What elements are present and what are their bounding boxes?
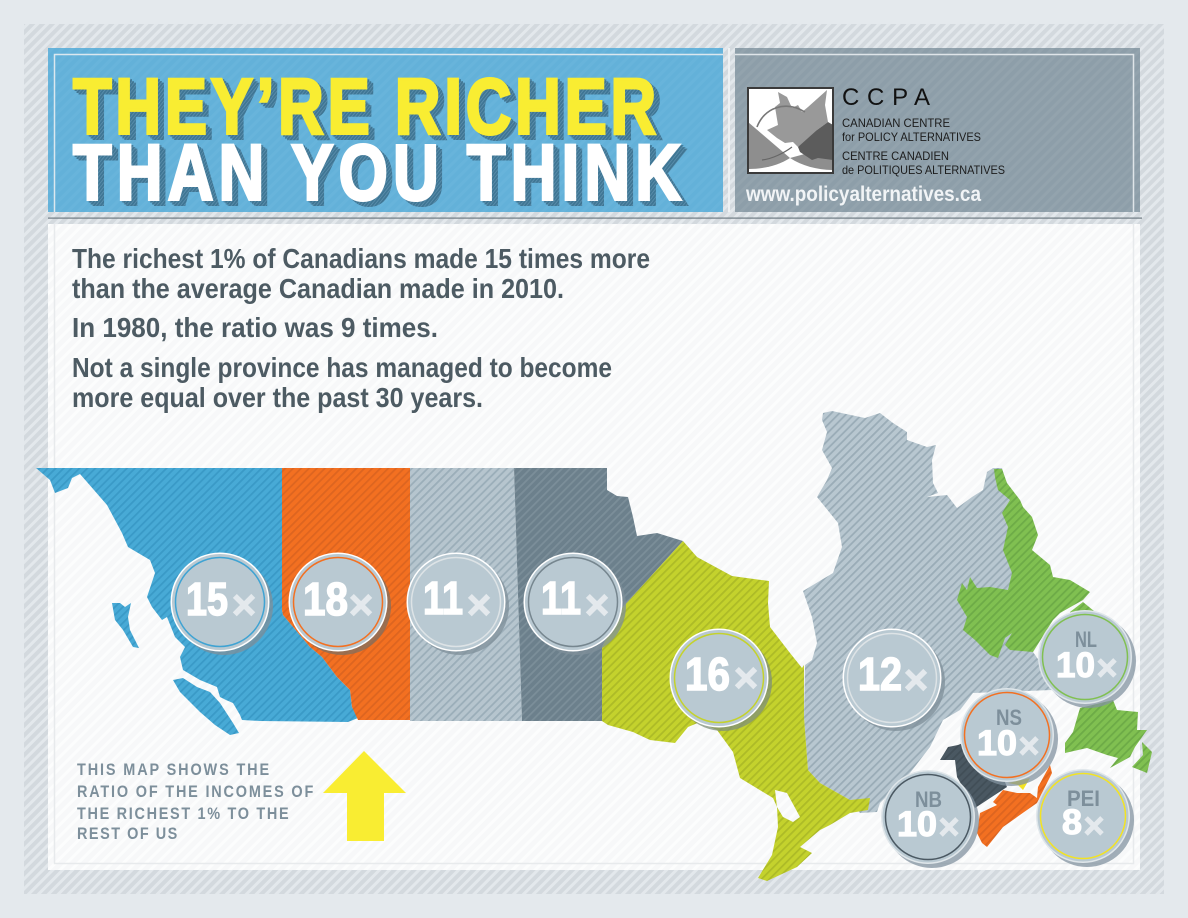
badge: PEI 8x: PEI <box>1067 786 1100 811</box>
badge: MB 11x: × <box>585 581 609 628</box>
text block: intro <box>72 243 650 413</box>
badge: NS 10x <box>960 688 1058 786</box>
badge: QC 12x: × <box>904 656 928 703</box>
badge: NB 10x <box>881 770 979 868</box>
text block: intro: more equal over the past 30 years. <box>72 382 483 413</box>
logo wordmark: CANADIAN CENTRE <box>842 116 950 130</box>
province: Nova Scotia <box>977 765 1052 847</box>
badge: NS 10x: 10 <box>977 724 1017 763</box>
badge: MB 11x <box>524 552 626 655</box>
badge: NS 10x: × <box>1018 725 1040 766</box>
badge: BC 15x: × <box>232 581 256 628</box>
province: Quebec <box>803 411 1052 813</box>
logo wordmark: CENTRE CANADIEN <box>842 149 949 163</box>
badge: PEI 8x: 8 <box>1062 803 1082 842</box>
badge: QC 12x <box>842 628 945 731</box>
province: New Brunswick <box>940 740 1007 808</box>
title: than you think: THAN YOU THINK <box>75 131 683 219</box>
logo wordmark: CCPA <box>842 84 930 111</box>
text block: intro: Not a single province has managed to become <box>72 352 612 383</box>
logo wordmark: de POLITIQUES ALTERNATIVES <box>842 163 1005 177</box>
title: They're richer: THEY’RE RICHER <box>77 66 660 154</box>
text block: intro: In 1980, the ratio was 9 times. <box>72 312 438 343</box>
badge: PEI 8x: × <box>1083 805 1105 846</box>
badge: NL 10x: 10 <box>1056 646 1095 685</box>
panel: CCPA logo block <box>735 48 1140 212</box>
province: Saskatchewan <box>410 468 522 721</box>
badge: SK 11x: × <box>467 581 491 628</box>
badge: ON 16x: 16 <box>685 648 730 700</box>
badge: AB 18x <box>288 552 391 655</box>
province: Prince Edward Island <box>1008 778 1030 790</box>
badge: NS 10x: NS <box>996 705 1022 730</box>
province: Newfoundland and Labrador <box>957 469 1152 773</box>
logo wordmark: for POLICY ALTERNATIVES <box>842 130 981 144</box>
badge: NB 10x: NB <box>915 787 942 812</box>
badge: NB 10x: × <box>938 806 960 847</box>
badge: ON 16x <box>670 628 772 731</box>
callout: map caption: RATIO OF THE INCOMES OF <box>77 783 314 801</box>
title: than you think: THAN YOU THINK <box>73 129 681 217</box>
badge: BC 15x <box>170 552 273 655</box>
badge: QC 12x: 12 <box>858 648 902 700</box>
logo wordmark <box>842 84 1005 177</box>
panel: white content area <box>48 224 1140 870</box>
badge: AB 18x: 18 <box>303 573 348 625</box>
province: British Columbia <box>36 468 358 735</box>
arrow: yellow up arrow <box>323 751 406 841</box>
badge: BC 15x: 15 <box>186 573 228 625</box>
badge: AB 18x: × <box>349 581 373 628</box>
callout: map caption <box>77 761 314 843</box>
panel: title banner <box>48 48 723 222</box>
callout: map caption: THIS MAP SHOWS THE <box>77 761 269 779</box>
text block: intro: The richest 1% of Canadians made 15 times more <box>72 243 650 274</box>
callout: map caption: THE RICHEST 1% TO THE <box>77 805 289 823</box>
callout: map caption: REST OF US <box>77 825 177 843</box>
title: They're richer: THEY’RE RICHER <box>73 63 656 151</box>
website url: www.policyalternatives.ca <box>745 183 981 206</box>
province: Ontario <box>602 541 870 881</box>
badge: MB 11x: 11 <box>541 572 581 624</box>
icon: CCPA maple leaf logo <box>748 88 833 173</box>
badge: SK 11x: 11 <box>423 572 463 624</box>
badge: NB 10x: 10 <box>897 805 937 844</box>
badge: NL 10x <box>1038 610 1136 708</box>
badge: NL 10x: × <box>1096 647 1118 688</box>
title: than you think: THAN YOU THINK <box>77 132 685 220</box>
title: than you think: THAN YOU THINK <box>79 134 687 222</box>
badge: PEI 8x <box>1036 769 1134 867</box>
badge: NL 10x: NL <box>1075 627 1097 652</box>
title: They're richer: THEY’RE RICHER <box>79 68 662 156</box>
badge: ON 16x: × <box>734 654 758 701</box>
title: They're richer: THEY’RE RICHER <box>75 65 658 153</box>
province: Alberta <box>282 468 410 720</box>
province: Manitoba <box>514 468 683 721</box>
text block: intro: than the average Canadian made in 2010. <box>72 273 564 304</box>
badge: SK 11x <box>406 552 509 655</box>
map of Canada <box>36 411 1152 881</box>
